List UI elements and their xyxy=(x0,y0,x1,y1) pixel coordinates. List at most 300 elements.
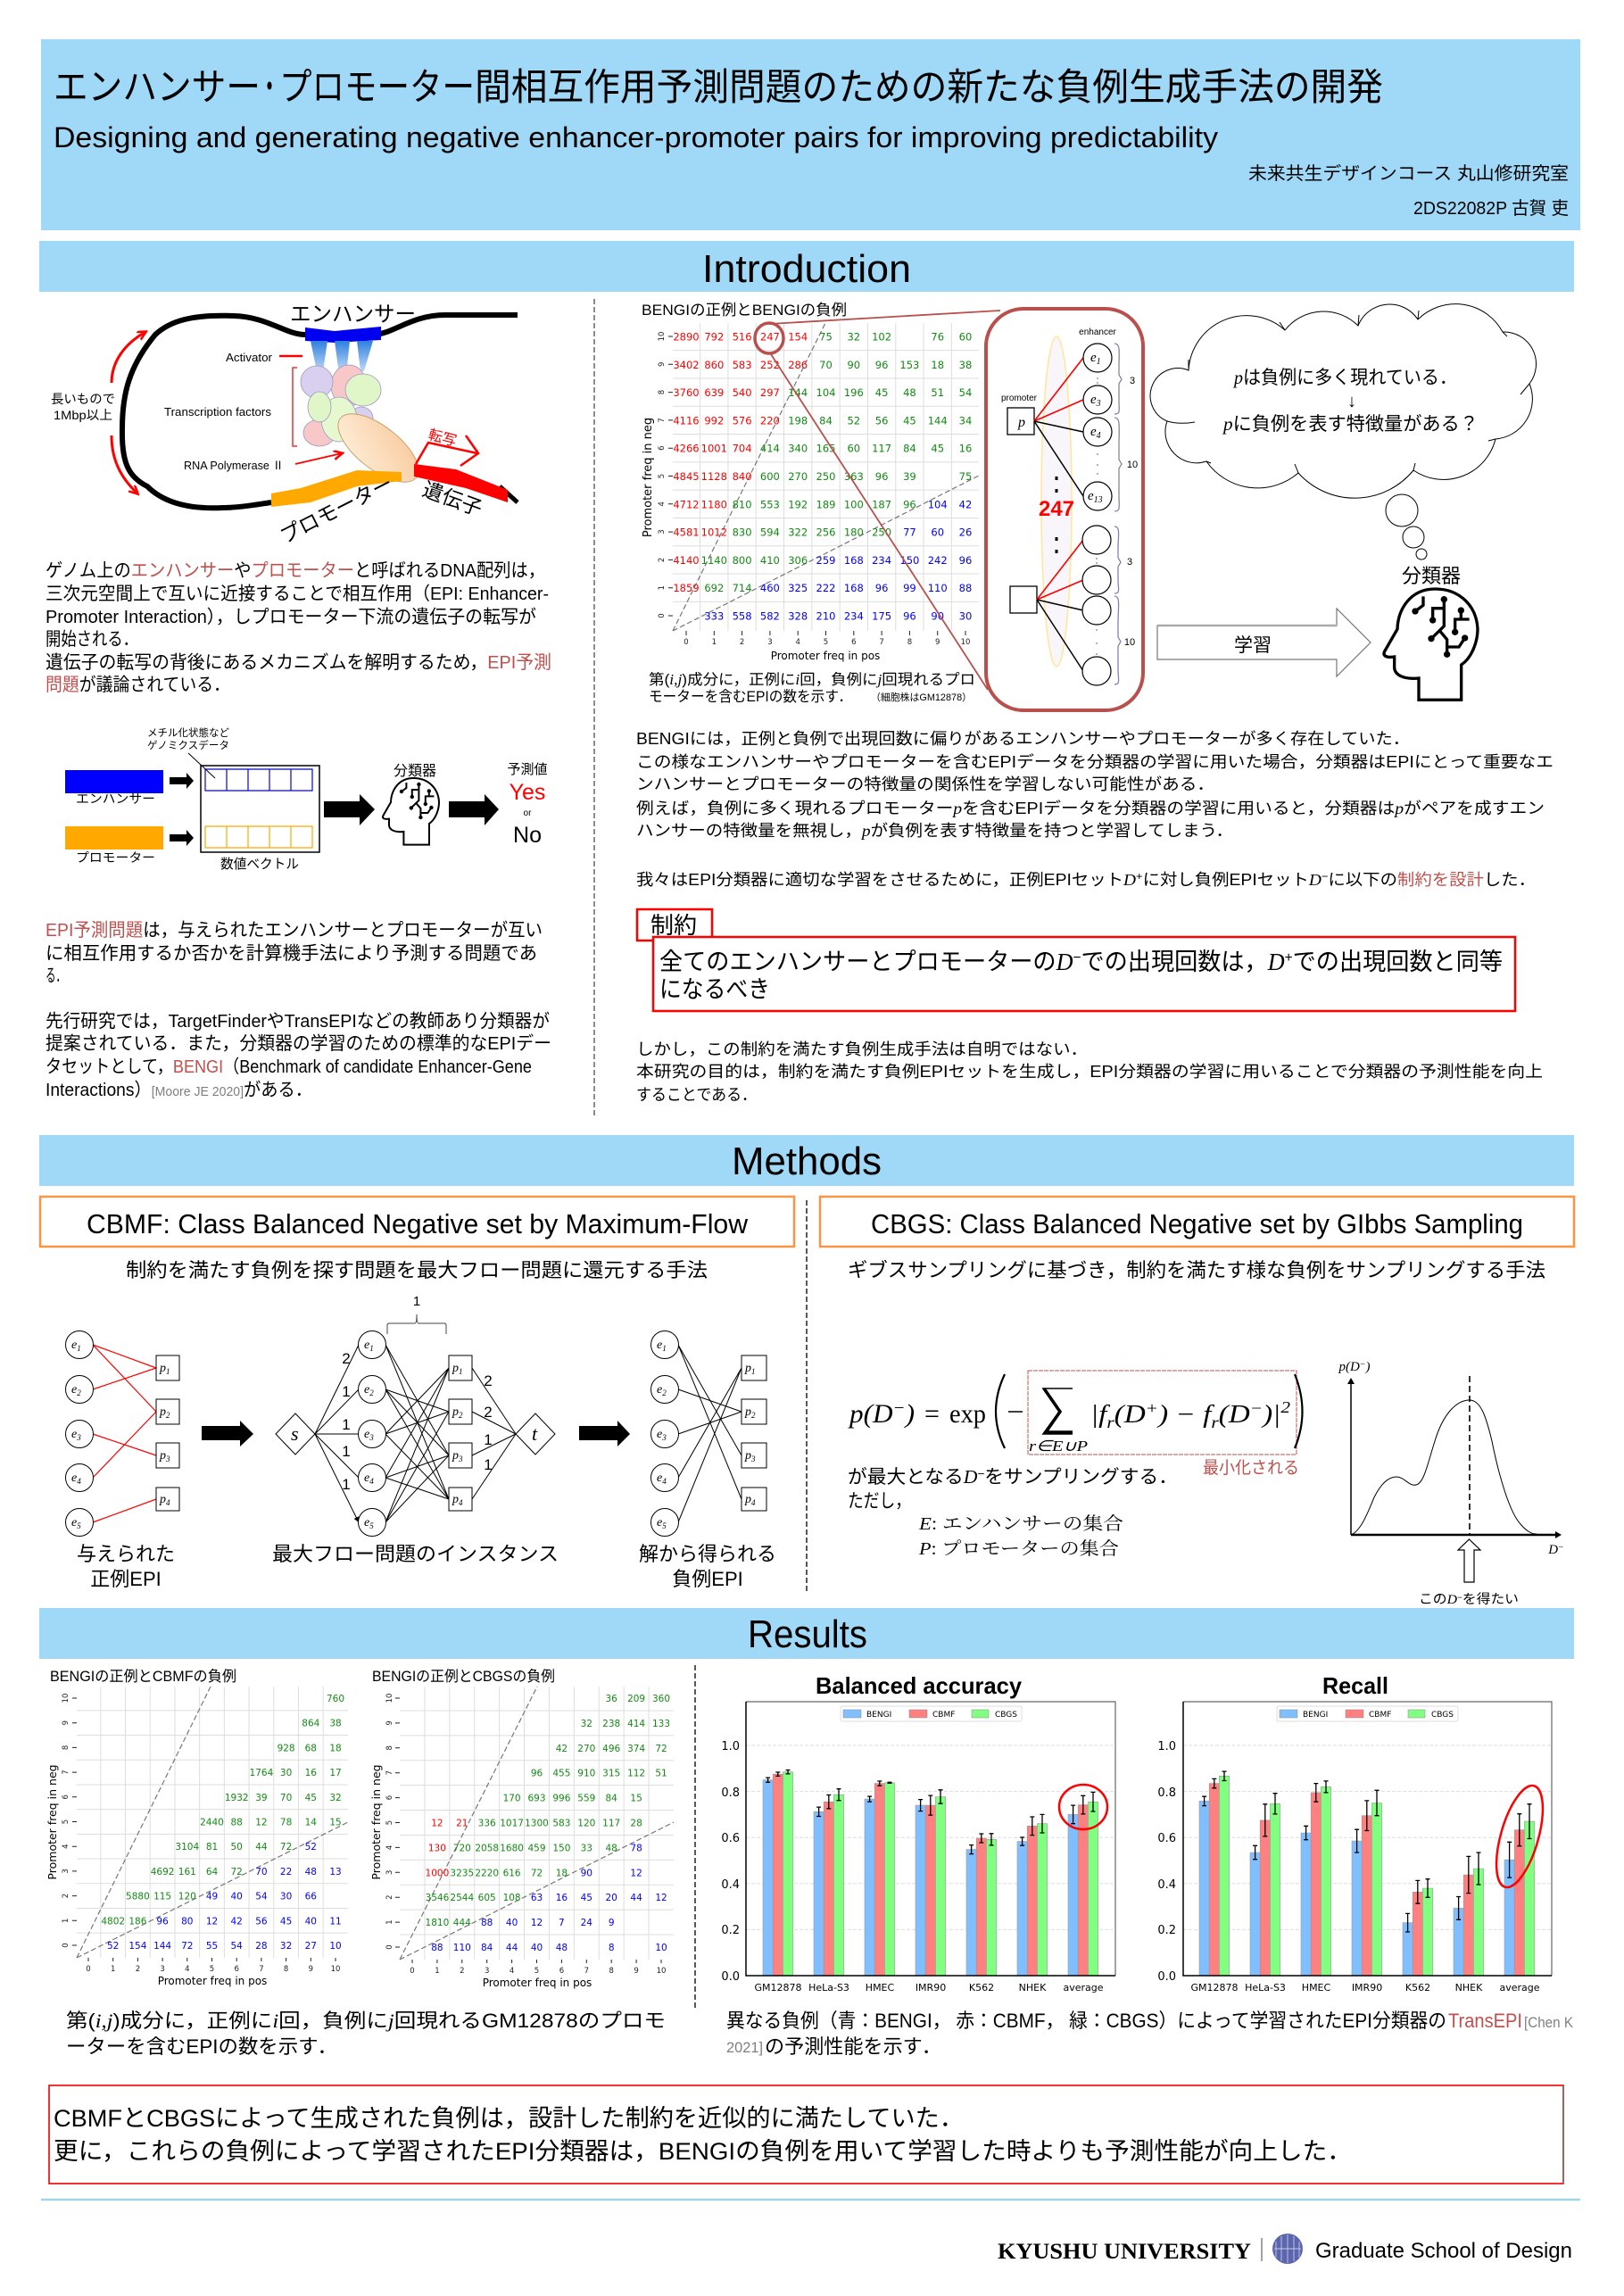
bar chart: recall xyxy=(1157,1672,1552,1993)
main title: エンハンサー xyxy=(54,66,261,108)
heatmap: BENGI positive vs CBGS negative: 12 xyxy=(630,1868,642,1878)
conclusion box: CBMFとCBGSによって生成された負例は，設計した制約を近似的に満たしていた． xyxy=(54,2105,964,2132)
intro text: EPI prediction problem: 提案されている．また，分類器の学習のための標準的なEPIデー xyxy=(46,1033,551,1054)
heatmap: BENGI positive vs CBGS negative: 88 xyxy=(481,1918,493,1928)
heatmap: BENGI positive vs negative: 270 xyxy=(788,470,808,483)
heatmap: BENGI positive vs CBMF negative: 50 xyxy=(231,1842,243,1853)
section heading: Introduction xyxy=(39,241,1574,292)
heatmap: BENGI positive vs CBMF negative: 3104 xyxy=(175,1842,199,1853)
heatmap: BENGI positive vs CBGS negative: 130 xyxy=(428,1843,446,1853)
graph: resulting negative EPI: 2 xyxy=(662,1388,667,1397)
zoom callout: cell 247: 10 xyxy=(1124,637,1135,648)
heatmap: BENGI positive vs negative: 582 xyxy=(760,610,780,623)
heatmap: BENGI positive vs CBMF negative: 6 xyxy=(62,1795,70,1800)
heatmap: BENGI positive vs CBMF negative: 88 xyxy=(231,1817,243,1828)
heatmap: BENGI positive vs CBGS negative: 2 xyxy=(460,1967,465,1976)
heatmap: BENGI positive vs negative: 90 xyxy=(847,359,860,371)
heatmap: BENGI positive vs CBGS negative: 720 xyxy=(453,1843,471,1853)
heatmap: BENGI positive vs negative: 5 xyxy=(658,474,667,478)
heatmap: BENGI positive vs negative: 192 xyxy=(788,498,808,510)
zoom callout: cell 247: e xyxy=(1090,393,1097,407)
heatmap: BENGI positive vs CBGS negative: 455 xyxy=(552,1769,570,1779)
heatmap: BENGI positive vs CBMF negative xyxy=(46,1668,348,1987)
heatmap: BENGI positive vs CBMF negative: 81 xyxy=(206,1842,218,1853)
heatmap: BENGI positive vs CBGS negative: 0 xyxy=(410,1967,415,1976)
EPI prediction pipeline diagram: 分類器 xyxy=(394,763,436,779)
heatmap: BENGI positive vs negative: 1001 xyxy=(701,443,727,455)
heatmap: BENGI positive vs negative: 6 xyxy=(851,638,857,647)
bar chart: balanced accuracy: 0.0 xyxy=(721,1970,740,1984)
heatmap: BENGI positive vs negative: 322 xyxy=(788,526,808,539)
section heading: Introduction: Introduction xyxy=(702,247,911,291)
heatmap: BENGI positive vs CBMF negative: 17 xyxy=(329,1768,342,1778)
heatmap: BENGI positive vs CBMF negative: 52 xyxy=(305,1842,317,1853)
heatmap: BENGI positive vs negative: 830 xyxy=(733,526,752,539)
heatmap: BENGI positive vs negative: 4116 xyxy=(673,414,700,427)
legend: CBMF xyxy=(1369,1711,1391,1720)
distance arrows xyxy=(112,332,145,383)
heatmap: BENGI positive vs CBGS negative: 3 xyxy=(485,1967,489,1976)
heatmap: BENGI positive vs CBGS negative: 7 xyxy=(584,1967,589,1976)
graph: max-flow instance: 1 xyxy=(342,1476,351,1493)
graph: max-flow instance: e xyxy=(364,1471,369,1485)
heatmap: BENGI positive vs CBGS negative: Promoter freq in neg xyxy=(369,1764,383,1880)
heatmap: BENGI positive vs CBGS negative: 120 xyxy=(577,1819,595,1829)
EPI prediction pipeline diagram: No xyxy=(513,823,542,848)
heatmap: BENGI positive vs negative: 1128 xyxy=(701,470,727,483)
bar chart: recall: 0.8 xyxy=(1157,1786,1176,1800)
zoom callout: cell 247: 3 xyxy=(1127,557,1132,568)
heatmap: BENGI positive vs CBGS negative: 0 xyxy=(385,1944,394,1950)
count 247: 247 xyxy=(1039,497,1074,521)
heatmap: BENGI positive vs CBGS negative: 3546 xyxy=(426,1893,450,1903)
heatmap: BENGI positive vs negative: 222 xyxy=(816,582,835,594)
graph: given positive EPI: e xyxy=(71,1516,77,1529)
zoom callout: cell 247: 10 xyxy=(1127,460,1138,470)
heatmap: BENGI positive vs negative: 96 xyxy=(903,498,916,510)
graph: max-flow instance: 1 xyxy=(342,1416,351,1433)
bar chart: recall: 0.4 xyxy=(1157,1878,1176,1892)
heatmap: BENGI positive vs CBGS negative: 374 xyxy=(627,1744,645,1754)
formula: r xyxy=(1211,1413,1220,1431)
heatmap: BENGI positive vs negative: 45 xyxy=(931,443,944,455)
bar chart: recall: GM12878 xyxy=(1190,1982,1239,1993)
heatmap: BENGI positive vs CBMF negative: 1764 xyxy=(250,1768,274,1778)
heatmap: BENGI positive vs CBGS negative: 10 xyxy=(385,1694,394,1703)
heatmap: BENGI positive vs negative: 144 xyxy=(788,386,808,399)
heatmap: BENGI positive vs negative: 150 xyxy=(899,554,919,567)
section heading: Methods xyxy=(39,1135,1574,1186)
intro text: EPI prediction problem: EPI予測問題は，与えられたエンハンサーとプロモーターが互い xyxy=(46,920,543,941)
heatmap: BENGI positive vs CBMF negative: 4692 xyxy=(151,1867,174,1877)
heatmap: BENGI positive vs negative: 104 xyxy=(928,498,948,510)
heatmap: BENGI positive vs CBMF negative: 38 xyxy=(329,1719,342,1729)
main title: 間相互作用予測問題のための新たな負例生成手法の開発 xyxy=(475,66,1383,108)
footer logo: Graduate School of Design xyxy=(1315,2239,1572,2263)
heatmap: BENGI positive vs CBMF negative: 9 xyxy=(62,1720,70,1725)
DNA looping diagram: 1Mbp以上 xyxy=(54,408,112,422)
heatmap: BENGI positive vs negative: 42 xyxy=(959,498,972,510)
heatmap caption: 第(i,j)成分に，正例に i回，負例に j回現れるプロ xyxy=(649,671,975,688)
graph: max-flow instance: 1 xyxy=(369,1344,374,1353)
heatmap: BENGI positive vs CBGS negative: 1017 xyxy=(500,1819,524,1829)
classifier head xyxy=(383,778,439,845)
heatmap: BENGI positive vs negative: 96 xyxy=(903,610,916,623)
heatmap: BENGI positive vs CBMF negative: 30 xyxy=(280,1768,292,1778)
heatmap: BENGI positive vs negative: 4845 xyxy=(673,470,700,483)
formula: − xyxy=(1250,1399,1263,1417)
heatmap: BENGI positive vs CBGS negative: 48 xyxy=(606,1843,617,1853)
heatmap: BENGI positive vs CBGS negative: 5 xyxy=(385,1820,394,1825)
graph: max-flow instance: 最大フロー問題のインスタンス xyxy=(272,1543,559,1565)
graph: given positive EPI: p xyxy=(160,1405,166,1419)
heatmap: BENGI positive vs CBMF negative: 72 xyxy=(280,1842,292,1853)
heatmap: BENGI positive vs CBMF negative: 55 xyxy=(206,1941,218,1952)
intro text: BENGI bias: − xyxy=(1322,870,1328,883)
heatmap: BENGI positive vs CBGS negative: 4 xyxy=(385,1845,394,1850)
heatmap: BENGI positive vs CBMF negative: 45 xyxy=(305,1793,317,1803)
bar chart: recall: K562 xyxy=(1405,1982,1430,1993)
heatmap: BENGI positive vs negative: 714 xyxy=(733,582,752,594)
heatmap: BENGI positive vs CBMF negative: 18 xyxy=(329,1743,342,1753)
heatmap: BENGI positive vs CBGS negative: 96 xyxy=(531,1769,543,1779)
formula: (D xyxy=(1219,1401,1250,1429)
graph: given positive EPI: e xyxy=(71,1383,77,1397)
distribution chart xyxy=(1338,1360,1564,1607)
bar chart: balanced accuracy: 0.6 xyxy=(721,1832,740,1845)
main title xyxy=(54,66,1383,108)
graph: resulting negative EPI: 解から得られる xyxy=(639,1543,776,1565)
heatmap: BENGI positive vs CBMF negative: 70 xyxy=(280,1793,292,1803)
zoom callout: cell 247: enhancer xyxy=(1079,327,1117,337)
heatmap: BENGI positive vs negative: 187 xyxy=(872,498,891,510)
heatmap: BENGI positive vs CBGS negative: 84 xyxy=(481,1943,493,1953)
heatmap: BENGI positive vs negative: 198 xyxy=(788,414,808,427)
heatmap: BENGI positive vs CBMF negative: 40 xyxy=(231,1892,243,1902)
CBMF heading box: CBMF: Class Balanced Negative set by Maximum-Flow xyxy=(87,1208,749,1239)
heatmap: BENGI positive vs negative: 34 xyxy=(959,414,972,427)
bar chart: recall: HeLa-S3 xyxy=(1245,1982,1286,1993)
heatmap: BENGI positive vs negative: 70 xyxy=(819,359,833,371)
intro text: BENGI bias: この様なエンハンサーやプロモーターを含むEPIデータを分類器の学習に用いた場合，分類器はEPIにとって重要なエ xyxy=(636,753,1554,771)
heatmap: BENGI positive vs CBGS negative: 616 xyxy=(503,1868,521,1878)
heatmap: BENGI positive vs negative: 10 xyxy=(961,638,970,647)
heatmap: BENGI positive vs CBMF negative: 12 xyxy=(255,1817,268,1828)
heatmap: BENGI positive vs negative: 1012 xyxy=(701,526,727,539)
CBGS description: ギブスサンプリングに基づき，制約を満たす様な負例をサンプリングする手法 xyxy=(848,1259,1545,1281)
heatmap: BENGI positive vs negative: 52 xyxy=(847,414,860,427)
heatmap: BENGI positive vs negative: 75 xyxy=(959,470,972,483)
heatmap: BENGI positive vs CBGS negative: 7 xyxy=(559,1918,565,1928)
graph: given positive EPI: p xyxy=(160,1493,166,1506)
DNA looping diagram: Activator xyxy=(226,351,273,364)
intro text: EPI prediction problem: る． xyxy=(46,966,66,986)
legend: CBGS xyxy=(1431,1711,1454,1720)
heatmap: BENGI positive vs CBMF negative: 10 xyxy=(62,1694,70,1703)
heatmap: BENGI positive vs negative: 84 xyxy=(903,443,916,455)
heatmap: BENGI positive vs negative: 60 xyxy=(847,443,860,455)
heatmap: BENGI positive vs CBGS negative: 8 xyxy=(609,1943,615,1953)
intro text: BENGI bias: ンハンサーとプロモーターの特徴量の関係性を学習しない可能性がある． xyxy=(636,775,1214,793)
heatmap: BENGI positive vs negative: 4266 xyxy=(673,443,700,455)
heatmap: BENGI positive vs negative: 189 xyxy=(816,498,835,510)
intro text: background: 三次元空間上で互いに近接することで相互作用（EPI: Enhancer- xyxy=(46,584,549,604)
heatmap: BENGI positive vs CBMF negative: 154 xyxy=(128,1941,147,1952)
constraint callout: + xyxy=(1285,950,1293,966)
heatmap: BENGI positive vs CBMF negative: 120 xyxy=(178,1892,196,1902)
formula explanation: が最大となるD xyxy=(848,1466,977,1488)
heatmap: BENGI positive vs CBGS negative: 12 xyxy=(431,1819,443,1829)
zoom callout: cell 247 xyxy=(755,309,1143,710)
heatmap: BENGI positive vs negative: 32 xyxy=(847,330,860,343)
formula: exp xyxy=(949,1399,986,1429)
heatmap: BENGI positive vs negative: 704 xyxy=(733,443,752,455)
heatmap: BENGI positive vs CBMF negative: 8 xyxy=(284,1965,288,1974)
graph: max-flow instance: 4 xyxy=(369,1477,374,1486)
heatmap: BENGI positive vs CBMF negative: 0 xyxy=(62,1943,70,1948)
heatmap: BENGI positive vs CBMF negative: 1 xyxy=(62,1919,70,1923)
heatmap: BENGI positive vs negative: 234 xyxy=(872,554,891,567)
heatmap: BENGI positive vs CBMF negative: 13 xyxy=(329,1867,342,1877)
graph: max-flow instance: s xyxy=(291,1422,299,1445)
conclusion box: 更に，これらの負例によって学習されたEPI分類器は，BENGIの負例を用いて学習した時よりも予測性能が向上した． xyxy=(54,2138,1352,2165)
heatmap: BENGI positive vs negative: 0 xyxy=(658,613,667,618)
heatmap: BENGI positive vs negative: 1 xyxy=(712,638,717,647)
heatmap: BENGI positive vs CBMF negative: 28 xyxy=(255,1941,268,1952)
heatmap: BENGI positive vs CBGS negative: 90 xyxy=(581,1868,592,1878)
heatmap: BENGI positive vs negative: 340 xyxy=(788,443,808,455)
heatmap: BENGI positive vs CBGS negative: 44 xyxy=(630,1893,642,1903)
formula: ) − f xyxy=(1156,1401,1214,1429)
graph: max-flow instance: t xyxy=(532,1422,538,1445)
conclusion box xyxy=(49,2085,1563,2184)
distribution chart: p(D xyxy=(1338,1360,1360,1374)
heatmap: BENGI positive vs CBGS negative: 315 xyxy=(602,1769,620,1779)
heatmap: BENGI positive vs CBMF negative: 40 xyxy=(305,1916,317,1927)
heatmap: BENGI positive vs CBGS negative: 108 xyxy=(503,1893,521,1903)
intro text: background: 遺伝子の転写の背後にあるメカニズムを解明するため，EPI予測 xyxy=(46,652,551,673)
heatmap: BENGI positive vs negative: 576 xyxy=(733,414,752,427)
graph: resulting negative EPI: 5 xyxy=(662,1521,667,1530)
graph: max-flow instance: 3 xyxy=(369,1433,374,1442)
enhancer bar xyxy=(65,770,163,793)
heatmap: BENGI positive vs CBGS negative: 24 xyxy=(581,1918,592,1928)
formula explanation xyxy=(848,1466,1178,1559)
heatmap: BENGI positive vs CBMF negative: 72 xyxy=(181,1941,193,1952)
zoom callout: cell 247: promoter xyxy=(1001,394,1038,403)
heatmap: BENGI positive vs negative: 168 xyxy=(844,554,864,567)
heatmap: BENGI positive vs CBGS negative: 33 xyxy=(581,1843,592,1853)
heatmap: BENGI positive vs negative: 540 xyxy=(733,386,752,399)
heatmap: BENGI positive vs negative: 18 xyxy=(931,359,944,371)
heatmap: BENGI positive vs negative: 84 xyxy=(819,414,833,427)
DNA strand xyxy=(122,315,518,508)
zoom callout: cell 247: 3 xyxy=(1096,399,1101,409)
graph: resulting negative EPI: 2 xyxy=(751,1411,756,1420)
heatmap: BENGI positive vs CBMF negative: Promoter freq in pos xyxy=(158,1975,267,1987)
heatmap: BENGI positive vs CBMF negative: 12 xyxy=(206,1916,218,1927)
heatmap: BENGI positive vs negative: 9 xyxy=(935,638,940,647)
bar chart: balanced accuracy: HeLa-S3 xyxy=(808,1982,849,1993)
heatmap: BENGI positive vs CBGS negative: 12 xyxy=(655,1893,667,1903)
heatmap: BENGI positive vs CBMF negative: 4802 xyxy=(101,1916,125,1927)
formula: |f xyxy=(1090,1401,1104,1429)
formula: 最小化される xyxy=(1203,1458,1299,1478)
big arrows xyxy=(324,794,499,825)
heatmap: BENGI positive vs CBGS negative: 21 xyxy=(456,1819,468,1829)
intro text: background: ゲノム上のエンハンサーやプロモーターと呼ばれるDNA配列は， xyxy=(46,560,545,581)
bar chart caption: TransEPI xyxy=(1448,2010,1522,2032)
heatmap: BENGI positive vs CBMF negative: 0 xyxy=(86,1965,91,1974)
CBMF description: 制約を満たす負例を探す問題を最大フロー問題に還元する手法 xyxy=(126,1259,708,1281)
bar chart: balanced accuracy: Balanced accuracy xyxy=(816,1672,1023,1699)
formula: r∈E∪P xyxy=(1029,1438,1088,1455)
heatmap: BENGI positive vs CBGS negative: 693 xyxy=(527,1794,546,1804)
heatmap: BENGI positive vs CBGS negative: 9 xyxy=(385,1720,394,1726)
zoom callout: cell 247: 1 xyxy=(1097,357,1101,367)
heatmap: BENGI positive vs negative: 333 xyxy=(704,610,724,623)
heatmap: BENGI positive vs negative: 165 xyxy=(816,443,835,455)
heatmap: BENGI positive vs CBMF negative: 4 xyxy=(62,1844,70,1849)
heatmap: BENGI positive vs CBGS negative: 51 xyxy=(655,1769,667,1779)
graph: given positive EPI: 3 xyxy=(76,1433,81,1442)
constraint callout: での出現回数は， xyxy=(1081,949,1268,975)
heatmap: BENGI positive vs negative: 363 xyxy=(844,470,864,483)
heatmap: BENGI positive vs CBGS negative: 32 xyxy=(581,1719,592,1729)
promoter boxes xyxy=(1007,408,1034,435)
heatmap: BENGI positive vs CBMF negative: 96 xyxy=(156,1916,169,1927)
heatmap: BENGI positive vs CBGS negative: 112 xyxy=(627,1769,645,1779)
heatmap: BENGI positive vs CBMF negative: 1 xyxy=(111,1965,115,1974)
formula explanation: − xyxy=(977,1467,984,1480)
heatmap: BENGI positive vs negative: 30 xyxy=(959,610,972,623)
arrow xyxy=(579,1421,630,1446)
graph: max-flow instance: e xyxy=(364,1339,369,1352)
heatmap: BENGI positive vs negative: 234 xyxy=(844,610,864,623)
DNA looping diagram: 長いもので xyxy=(51,392,115,406)
heatmap: BENGI positive vs negative: 100 xyxy=(844,498,864,510)
graph: resulting negative EPI: e xyxy=(657,1471,662,1485)
EPI prediction pipeline diagram: エンハンサー xyxy=(76,792,155,806)
bar chart: balanced accuracy: K562 xyxy=(969,1982,994,1993)
heatmap: BENGI positive vs CBMF negative: 64 xyxy=(206,1867,218,1877)
zoom callout: cell 247: p xyxy=(1017,415,1025,430)
zoom callout: cell 247: e xyxy=(1090,351,1097,365)
heatmap: BENGI positive vs CBGS negative: 910 xyxy=(577,1769,595,1779)
ellipsis dots xyxy=(1097,377,1098,655)
heatmap: BENGI positive vs CBMF negative: 11 xyxy=(329,1916,342,1927)
zoom callout: cell 247: 3 xyxy=(1130,376,1135,386)
graph: max-flow instance: 1 xyxy=(342,1443,351,1460)
heatmap: BENGI positive vs negative: 8 xyxy=(907,638,912,647)
heatmap: BENGI positive vs CBGS negative: 238 xyxy=(602,1719,620,1729)
section heading: Results xyxy=(39,1608,1574,1659)
graph: resulting negative EPI: 3 xyxy=(750,1455,756,1463)
thought cloud: pに負例を表す特徴量がある？ xyxy=(1222,413,1479,435)
heatmap: BENGI positive vs negative: 77 xyxy=(903,526,916,539)
bar chart: recall: Recall xyxy=(1322,1672,1388,1699)
heatmap: BENGI positive vs CBMF negative: BENGIの正例とCBMFの負例 xyxy=(50,1668,236,1685)
formula: + xyxy=(1146,1399,1158,1417)
heatmap: BENGI positive vs negative: 1859 xyxy=(673,582,700,594)
graph: max-flow instance: e xyxy=(364,1428,369,1441)
thought cloud: pは負例に多く現れている． xyxy=(1232,367,1457,388)
heatmap: BENGI positive vs negative: 810 xyxy=(733,498,752,510)
formula explanation: E: エンハンサーの集合 xyxy=(918,1513,1123,1534)
heatmap: BENGI positive vs negative: 558 xyxy=(733,610,752,623)
distribution chart: ) xyxy=(1365,1360,1371,1374)
bar chart: balanced accuracy: GM12878 xyxy=(754,1982,802,1993)
edges xyxy=(1034,358,1083,600)
intro text: EPI prediction problem: 先行研究では，TargetFinderやTransEPIなどの教師あり分類器が xyxy=(46,1011,550,1032)
intro text: EPI prediction problem xyxy=(46,920,551,1100)
heatmap: BENGI positive vs negative: 4 xyxy=(795,638,800,647)
graph: max-flow instance: 2 xyxy=(484,1404,493,1421)
heatmap: BENGI positive vs CBMF negative: 161 xyxy=(178,1867,196,1877)
formula: (D xyxy=(1114,1401,1146,1429)
training arrow: 学習 xyxy=(1234,635,1272,656)
heatmap: BENGI positive vs CBGS negative: 559 xyxy=(577,1794,595,1804)
DNA looping diagram: 遺伝子 xyxy=(419,477,485,520)
heatmap: BENGI positive vs negative: 56 xyxy=(875,414,888,427)
heatmap: BENGI positive vs CBMF negative: 8 xyxy=(62,1745,70,1750)
heatmap: BENGI positive vs negative: 96 xyxy=(875,470,888,483)
graph: max-flow instance: 1 xyxy=(342,1383,351,1400)
formula: r xyxy=(1106,1413,1115,1431)
heatmap: BENGI positive vs negative: 460 xyxy=(760,582,780,594)
heatmap: BENGI positive vs CBMF negative: 15 xyxy=(329,1817,342,1828)
heatmap: BENGI positive vs CBGS negative: 15 xyxy=(630,1794,642,1804)
heatmap: BENGI positive vs CBGS negative: 996 xyxy=(552,1794,571,1804)
braces xyxy=(1114,344,1122,684)
heatmap: BENGI positive vs negative: 516 xyxy=(733,330,752,343)
formula: = xyxy=(924,1399,940,1429)
heatmap: BENGI positive vs CBGS negative: 12 xyxy=(531,1918,543,1928)
EPI prediction pipeline diagram: Yes xyxy=(510,780,545,805)
heatmap: BENGI positive vs negative: 48 xyxy=(903,386,916,399)
graph: resulting negative EPI: e xyxy=(657,1428,662,1441)
heatmap: BENGI positive vs CBMF negative: 27 xyxy=(305,1941,317,1952)
constraint callout xyxy=(637,909,1515,1011)
heatmap: BENGI positive vs CBMF negative: 2440 xyxy=(200,1817,224,1828)
graph: given positive EPI: 4 xyxy=(166,1498,170,1507)
graph: resulting negative EPI: 3 xyxy=(661,1433,667,1442)
intro text: BENGI bias: D xyxy=(1308,871,1322,889)
heatmap: BENGI positive vs CBMF negative: 49 xyxy=(206,1892,218,1902)
constraint callout: での出現回数と同等 xyxy=(1293,949,1503,975)
heatmap: BENGI positive vs CBMF negative: 1932 xyxy=(225,1793,249,1803)
heatmap: BENGI positive vs negative: 286 xyxy=(788,359,808,371)
formula: ) xyxy=(904,1399,915,1429)
bar chart: recall: 0.0 xyxy=(1157,1970,1176,1984)
gene bar xyxy=(414,464,508,502)
heatmap: BENGI positive vs negative: 410 xyxy=(760,554,780,567)
heatmap: BENGI positive vs negative: 5 xyxy=(824,638,828,647)
heatmap: BENGI positive vs CBMF negative: 7 xyxy=(62,1770,70,1775)
enhancer label: エンハンサー xyxy=(290,303,416,327)
heatmap: BENGI positive vs CBGS negative: 18 xyxy=(556,1868,568,1878)
footer logo xyxy=(998,2234,1572,2264)
intro text: EPI prediction problem: Interactions）[Moore JE 2020]がある． xyxy=(46,1080,312,1100)
heatmap: BENGI positive vs CBGS negative: 8 xyxy=(609,1967,614,1976)
classifier label and head: 分類器 xyxy=(1402,565,1461,587)
graph: max-flow instance: 3 xyxy=(458,1455,463,1463)
heatmap: BENGI positive vs negative: Promoter freq in pos xyxy=(771,650,880,662)
graph: max-flow instance: 1 xyxy=(459,1367,462,1376)
intro text: background: 開始される． xyxy=(46,629,138,650)
heatmap: BENGI positive vs CBGS negative: 2058 xyxy=(475,1843,499,1853)
heatmap: BENGI positive vs negative: 992 xyxy=(704,414,724,427)
